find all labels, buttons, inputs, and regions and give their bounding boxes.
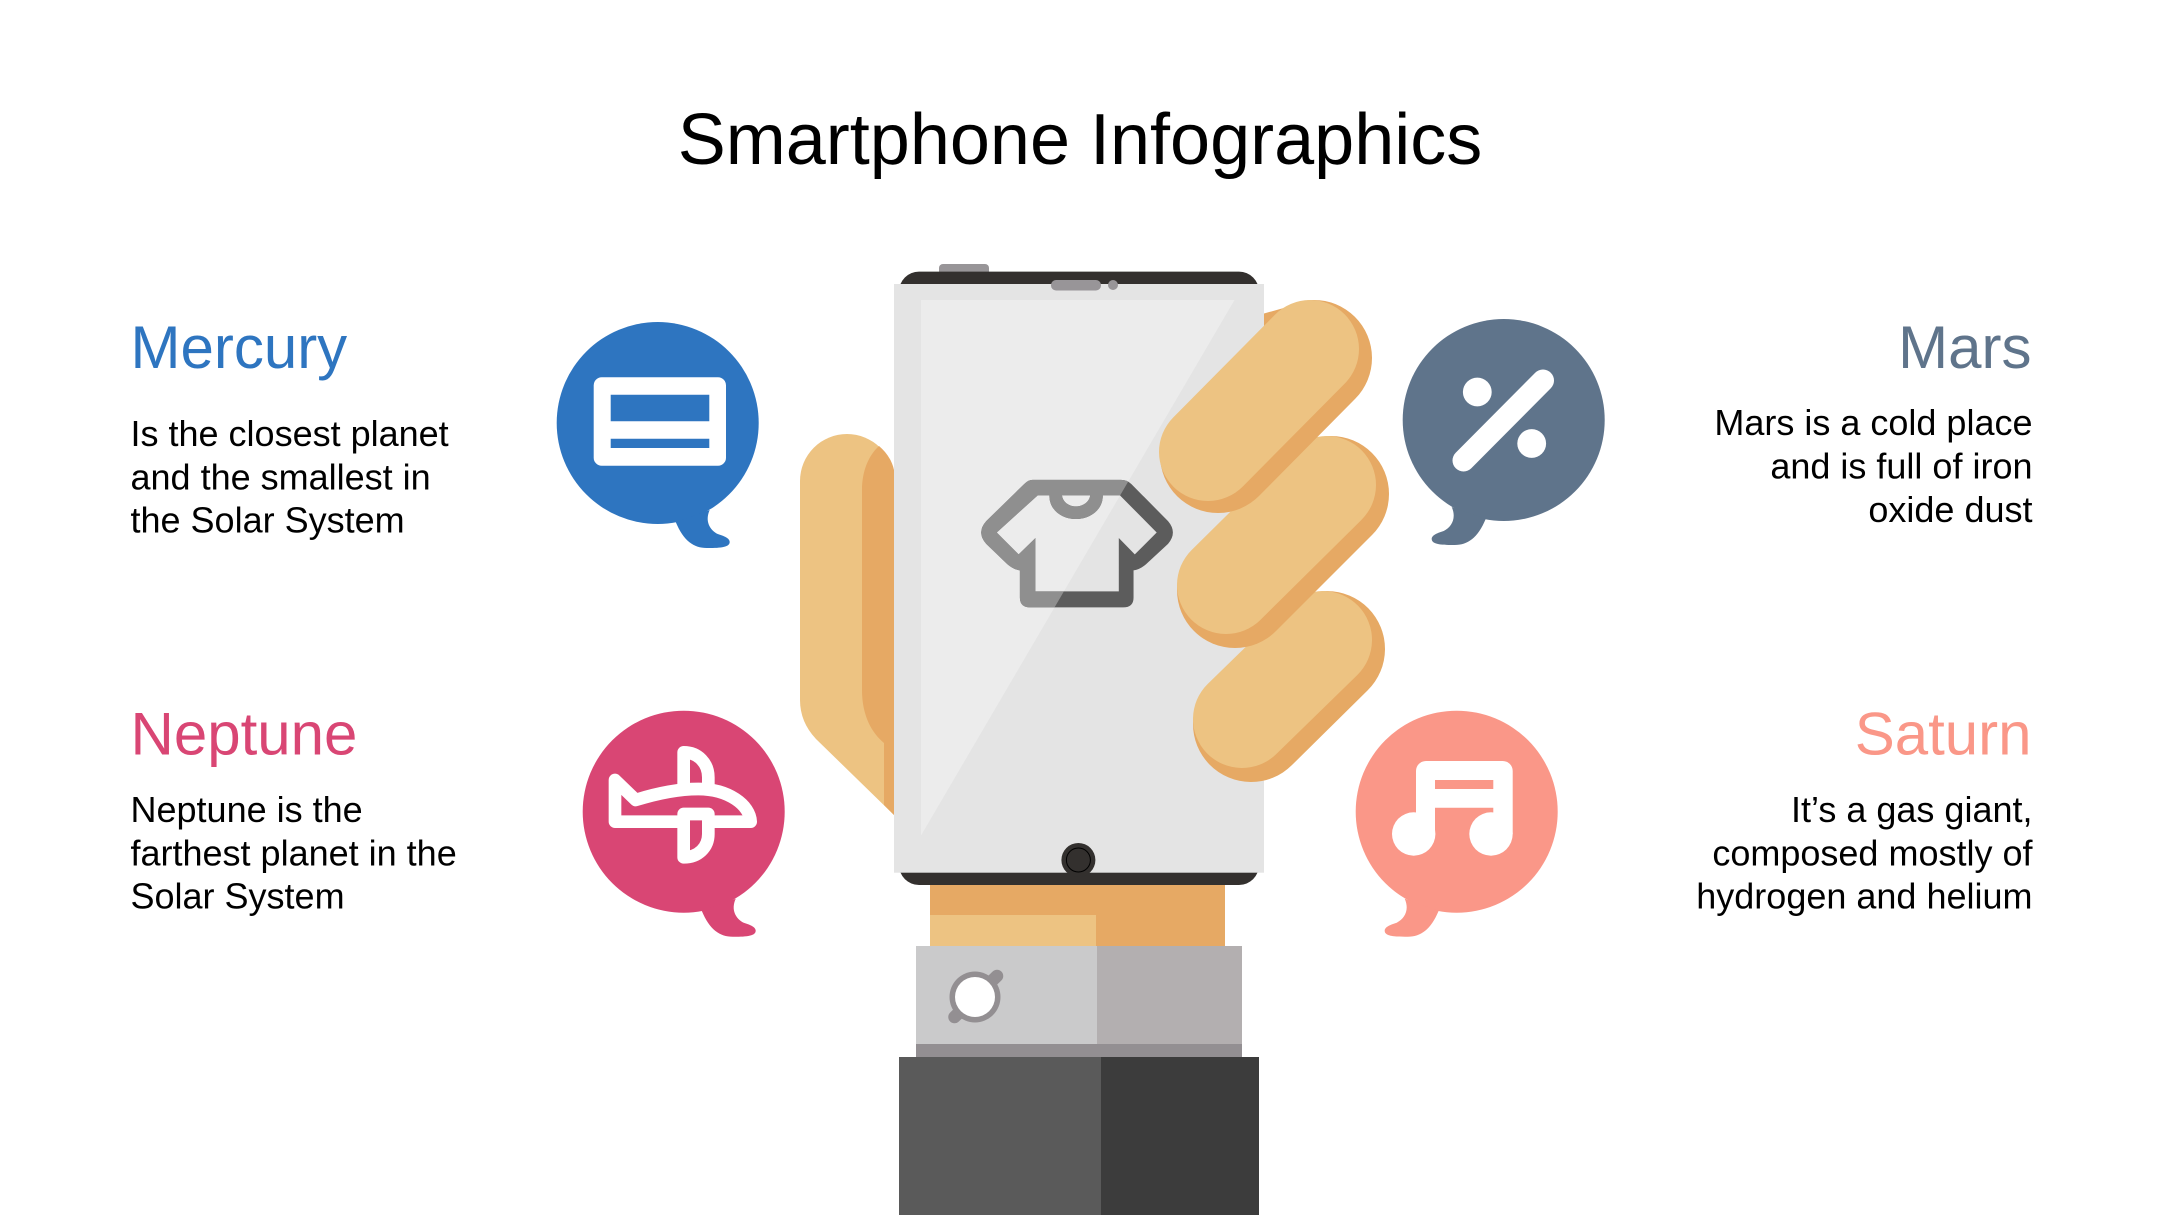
text block: Saturn description: It’s a gas giant, (1791, 789, 2032, 830)
screen highlight (921, 300, 1234, 836)
phone sensor (1108, 280, 1118, 290)
icon: Neptune speech bubble with airplane (583, 711, 785, 937)
shirt cuff (916, 946, 1242, 1057)
sleeve (899, 1057, 1259, 1215)
heading: Neptune: Neptune (130, 701, 357, 768)
icon: Saturn speech bubble with music note (1356, 711, 1558, 937)
text block: Saturn description: hydrogen and helium (1696, 876, 2032, 917)
ring finger (1242, 640, 1327, 724)
text block: Mercury description: Is the closest planet (130, 413, 449, 454)
panel: Neptune text (130, 701, 457, 917)
text block: Neptune description: farthest planet in the (130, 832, 457, 873)
heading: Mars: Mars (1898, 314, 2032, 381)
text block: Mars description: Mars is a cold place (1714, 402, 2032, 443)
panel: Saturn text (1696, 701, 2033, 917)
text block: Mars description: oxide dust (1868, 489, 2032, 530)
home button (1061, 843, 1095, 877)
text block: Mercury description: the Solar System (130, 500, 405, 541)
middle finger (1226, 485, 1331, 590)
heading: Saturn: Saturn (1855, 701, 2032, 768)
icon: cuff button (950, 972, 1000, 1022)
text block: Neptune description: Solar System (130, 876, 345, 917)
title: Smartphone Infographics (678, 100, 1482, 180)
panel: Mars text (1714, 314, 2032, 530)
icon: t-shirt on screen (981, 480, 1173, 607)
index finger (1208, 349, 1314, 455)
text block: Mars description: and is full of iron (1770, 446, 2032, 486)
icon: Mercury speech bubble with card (557, 322, 759, 548)
illustration: hand holding smartphone (800, 264, 1331, 1215)
text block: Mercury description: and the smallest in (130, 456, 431, 497)
phone speaker (1051, 280, 1101, 290)
finger piece behind phone (1264, 306, 1289, 332)
text block: Neptune description: Neptune is the (130, 789, 363, 830)
panel: Mercury text (130, 314, 449, 541)
phone body (899, 272, 1259, 885)
wrist (930, 880, 1225, 946)
phone screen (894, 284, 1264, 873)
smartphone (894, 264, 1264, 885)
icon: Mars speech bubble with percent sign (1403, 319, 1605, 545)
phone side button (939, 264, 989, 276)
thumb (800, 434, 894, 815)
heading: Mercury: Mercury (130, 314, 347, 381)
text block: Saturn description: composed mostly of (1712, 832, 2033, 873)
